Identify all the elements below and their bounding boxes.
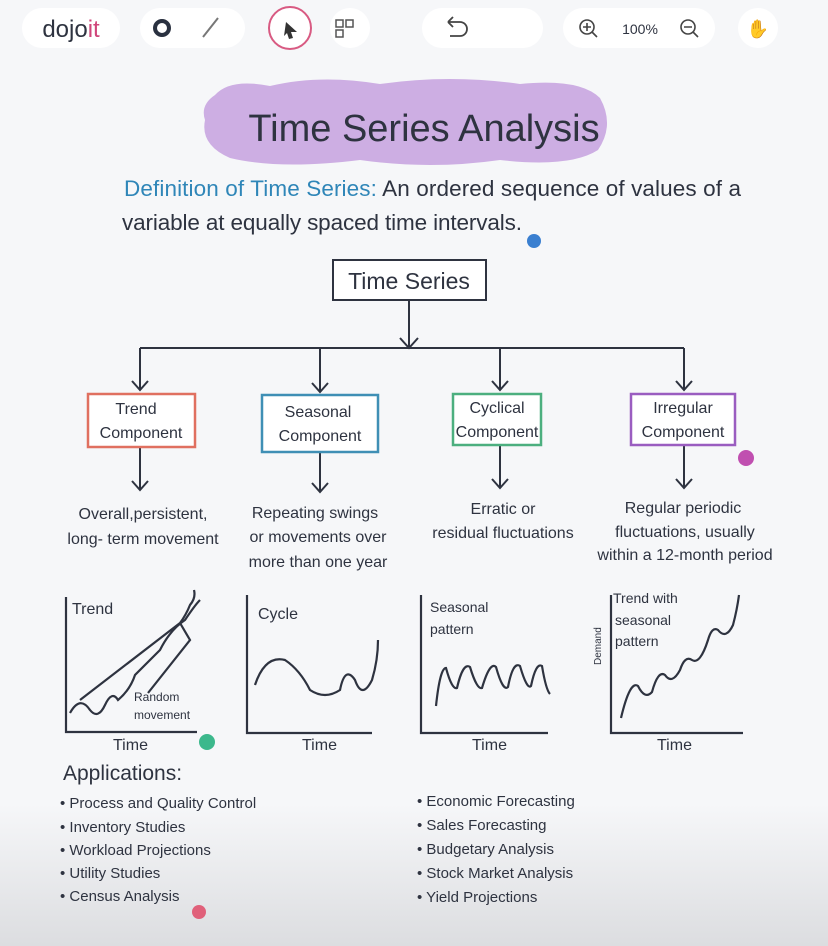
- text: Cycle: [258, 606, 298, 623]
- applications: • Economic Forecasting: [417, 793, 575, 810]
- text: pattern: [615, 633, 659, 649]
- descriptions: more than one year: [249, 554, 388, 571]
- title: Time Series Analysis: [248, 108, 600, 150]
- toolbar: 100%: [622, 21, 658, 37]
- text: Seasonal: [430, 599, 488, 615]
- descriptions: Regular periodic: [625, 500, 741, 517]
- component boxes: [88, 394, 754, 466]
- text: movement: [134, 708, 191, 722]
- text: seasonal: [615, 612, 671, 628]
- root box: [333, 260, 486, 300]
- definition: variable at equally spaced time intervals.: [122, 210, 522, 235]
- component boxes: Trend: [115, 401, 157, 418]
- applications: Applications:: [63, 762, 182, 785]
- connectors: [132, 300, 692, 492]
- descriptions: Overall,persistent,: [79, 506, 207, 523]
- text: Time: [657, 737, 692, 754]
- component boxes: Irregular: [653, 400, 713, 417]
- definition: Definition of Time Series: An ordered sequence of values of a: [124, 176, 741, 201]
- applications: • Utility Studies: [60, 865, 160, 882]
- text: Time: [472, 737, 507, 754]
- text: Demand: [593, 627, 604, 665]
- descriptions: within a 12-month period: [596, 547, 773, 564]
- descriptions: residual fluctuations: [432, 525, 574, 542]
- title: [204, 79, 607, 165]
- root box: Time Series: [348, 268, 470, 294]
- descriptions: long- term movement: [67, 531, 219, 548]
- applications: • Process and Quality Control: [60, 795, 256, 812]
- component boxes: Component: [279, 428, 362, 445]
- applications: • Sales Forecasting: [417, 817, 546, 834]
- component boxes: Seasonal: [285, 404, 351, 421]
- text: Time: [113, 737, 148, 754]
- toolbar: ✋: [747, 18, 769, 39]
- component boxes: Component: [642, 424, 725, 441]
- applications: • Workload Projections: [60, 842, 211, 859]
- component boxes: Cyclical: [469, 400, 525, 417]
- toolbar: [22, 7, 778, 49]
- definition: [122, 176, 741, 248]
- descriptions: [67, 500, 773, 571]
- descriptions: Erratic or: [471, 501, 536, 518]
- descriptions: Repeating swings: [252, 505, 378, 522]
- toolbar: dojoit: [42, 16, 100, 43]
- text: Trend with: [613, 590, 678, 606]
- applications: • Yield Projections: [417, 889, 537, 906]
- applications: [60, 762, 575, 919]
- applications: • Budgetary Analysis: [417, 841, 554, 858]
- text: Random: [134, 690, 179, 704]
- component boxes: Component: [100, 425, 183, 442]
- applications: • Census Analysis: [60, 888, 179, 905]
- text: Time: [302, 737, 337, 754]
- component boxes: Component: [456, 424, 539, 441]
- text: pattern: [430, 621, 474, 637]
- charts: [66, 590, 743, 733]
- applications: • Inventory Studies: [60, 819, 185, 836]
- descriptions: fluctuations, usually: [615, 524, 755, 541]
- descriptions: or movements over: [250, 529, 387, 546]
- text: Trend: [72, 601, 113, 618]
- applications: • Stock Market Analysis: [417, 865, 573, 882]
